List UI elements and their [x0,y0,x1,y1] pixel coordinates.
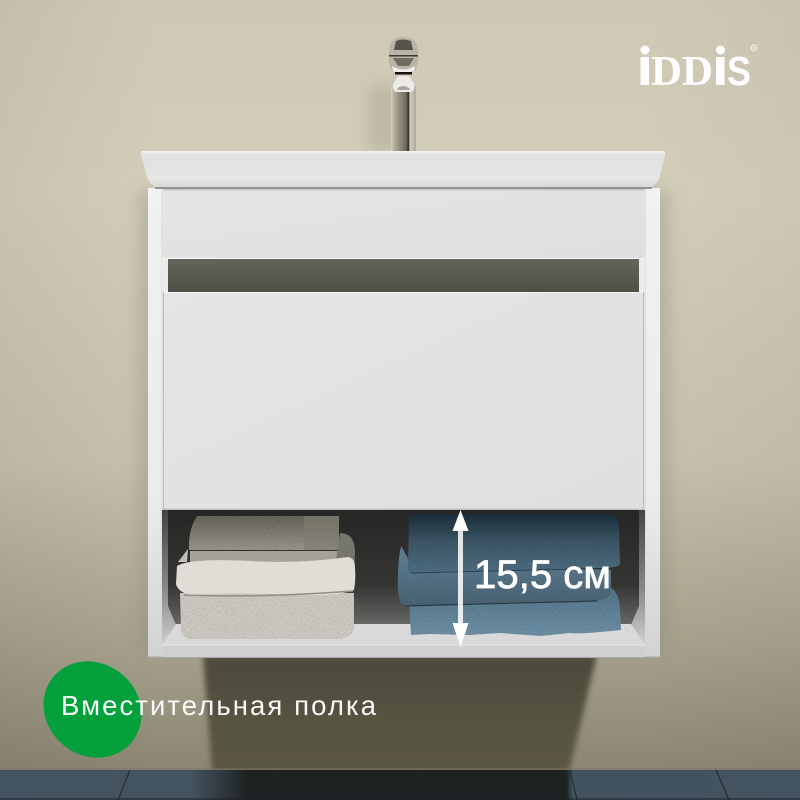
cabinet body [148,188,660,658]
blue towels [398,514,621,636]
upper cabinet panel [162,190,645,258]
faucet [389,37,418,151]
logo [640,45,757,95]
open shelf [162,510,645,657]
caption: Вместительная полка [61,690,377,721]
cabinet shadow on wall [203,655,597,772]
logo: S [727,48,751,94]
floor tiles [0,768,800,800]
wash basin [141,151,665,190]
drawer front [163,292,644,510]
logo: DD [651,49,713,95]
cabinet side shadow [138,190,670,650]
basket [176,533,355,639]
upper recess [162,258,645,292]
green blob [24,641,161,778]
dimension label: 15,5 см [474,553,611,597]
height dimension arrow [452,510,468,647]
faucet shadow [368,85,402,151]
folded grey towels [189,516,339,563]
